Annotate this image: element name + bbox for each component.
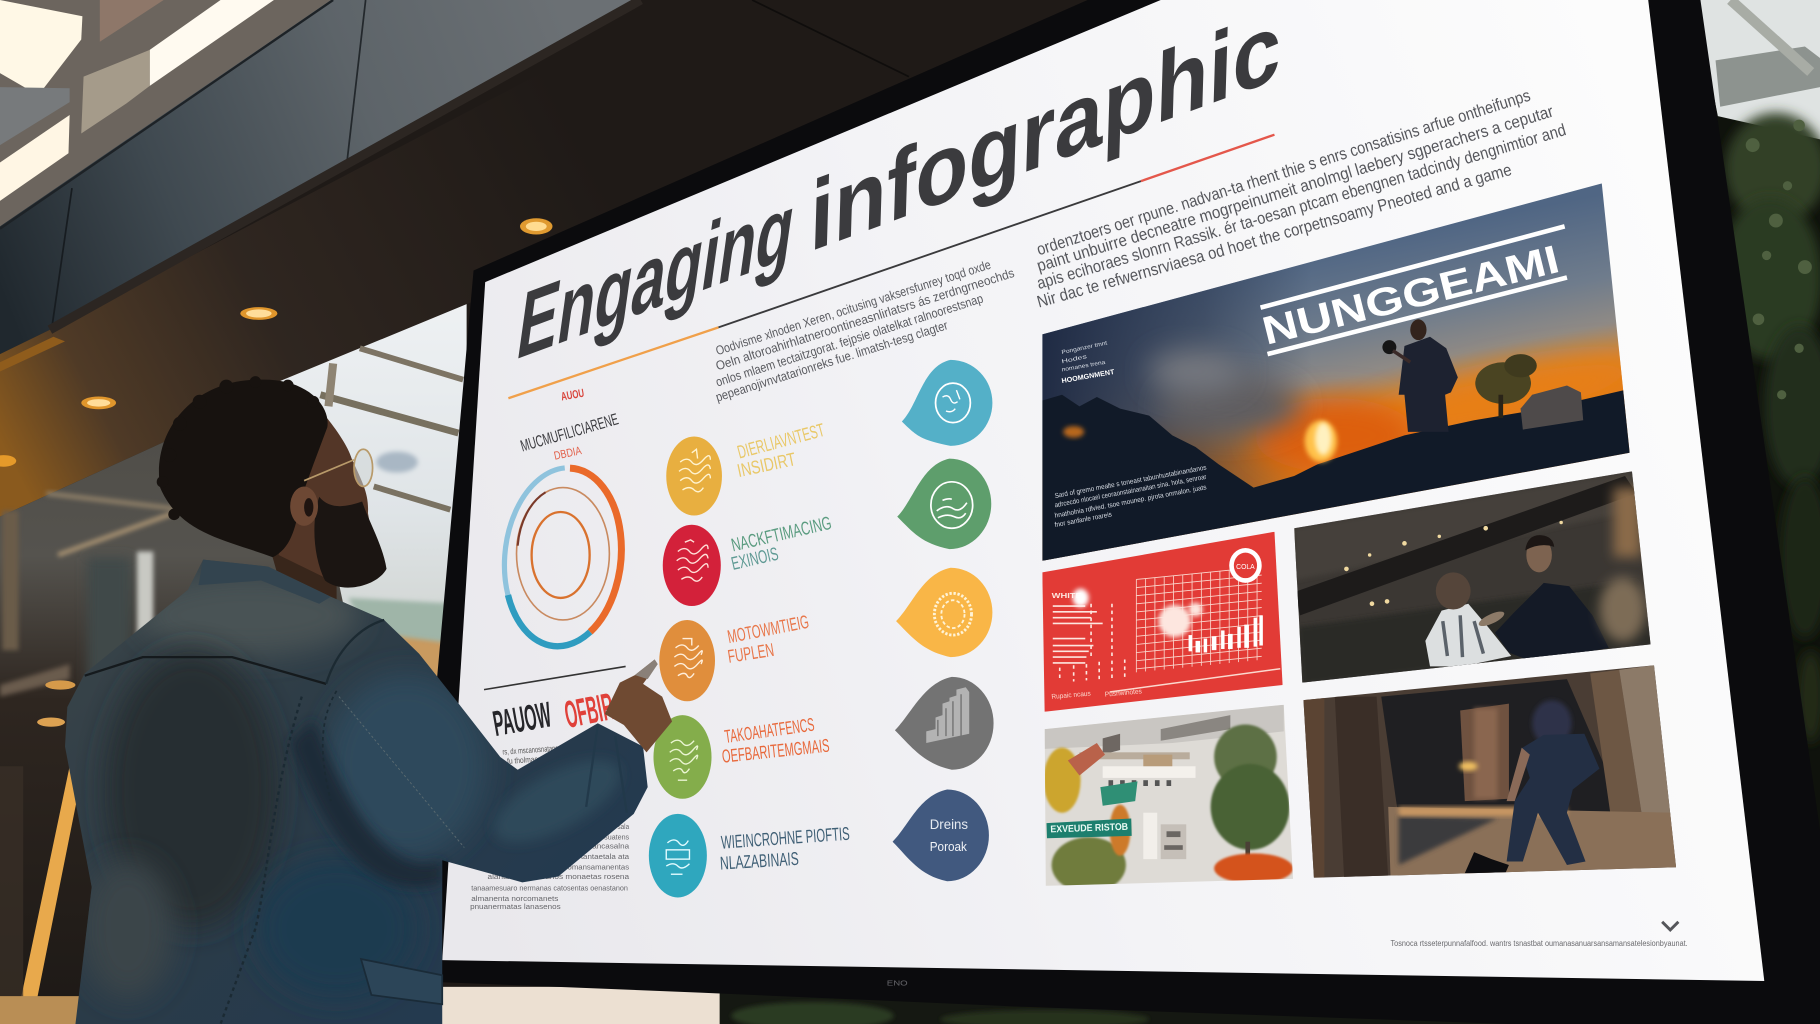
divider and promo words: OFBIR <box>561 685 617 737</box>
photo panel: garden building collage <box>1044 704 1293 886</box>
bottom rule and caption: Rupaic ncaus <box>1051 690 1092 701</box>
photo small captions: fnor sanfanle roareis <box>1054 511 1113 529</box>
item 1: amber circle: INSIDIRT <box>735 448 798 481</box>
item 2: red circle: NACKFTIMACING <box>729 512 833 555</box>
chart grid <box>1136 567 1262 672</box>
photo panel: person walking in a lobby <box>1300 662 1683 882</box>
icon: navy teardrop with text: Dreins <box>930 816 968 832</box>
jacket <box>65 560 648 1024</box>
item 4: green circle: TAKOAHATFENCS <box>723 714 816 747</box>
display screen panel <box>442 0 1764 981</box>
item 3: orange circle <box>659 611 811 701</box>
icon: navy teardrop with text: Poroak <box>930 839 967 854</box>
divider and promo words: fu tholmaonpataneanos <box>507 752 577 766</box>
title <box>511 0 1282 380</box>
photo small captions: Sard of gremo mealte s toneast tabunhustabinandanos <box>1054 464 1208 500</box>
small text block under the arm: pnuanermatas lanasenos <box>470 902 561 911</box>
jacket pocket <box>361 959 442 1004</box>
intro text block: left: onlos mlaem tectaitzgorat. fejpsie olatelkat ralnoorestsnap <box>714 291 985 389</box>
icon: green teardrop with road circle <box>897 459 991 549</box>
beard <box>314 497 387 588</box>
background: right window and foliage <box>1695 0 1820 1024</box>
small text block under the arm: etasnal ornanesuatens <box>557 832 629 841</box>
icon: teal teardrop with globe <box>902 360 992 446</box>
bottom rule and caption <box>1051 669 1280 701</box>
chart headings: AUOU <box>560 387 585 403</box>
photo headline bars and word: NUNGGEAMI <box>1258 237 1564 354</box>
item 3: orange circle: FUPLEN <box>726 639 775 667</box>
intro text block: left: pepeanojivnvtatarionreks fue. limatsh-tesg clagter <box>714 317 950 405</box>
divider and promo words: rs, dx mscanosnatans, bvlp <box>502 743 573 757</box>
photo small captions: nomanes trena <box>1061 360 1107 373</box>
small text block under the arm: alanaiutes laseranos monaetas rosena <box>487 872 630 881</box>
photo panel: red data chart card <box>1042 532 1282 712</box>
hair <box>159 380 328 557</box>
hand pointing at the screen <box>605 659 672 752</box>
badge: COLA <box>1236 564 1255 571</box>
photo small captions: Ponganzer tmnt <box>1061 340 1108 356</box>
item 3: orange circle: MOTOWMTIEIG <box>726 611 811 647</box>
glasses <box>304 449 373 486</box>
person: man with raised arm <box>65 376 672 1024</box>
photo panel: two people at night <box>1294 471 1650 683</box>
banner with label: EXVEUDE RISTOB <box>1050 822 1128 835</box>
photo small captions: Hodes <box>1061 354 1088 365</box>
bottom rule and caption: Pushwlnotes <box>1105 688 1143 699</box>
item 1: amber circle <box>666 419 827 515</box>
left notes <box>1052 589 1125 682</box>
chart headings: DBDIA <box>553 444 583 463</box>
title rule: orange, dark and red segments <box>508 135 1274 398</box>
intro text block: left: Oodvisme xlnoden Xeren, ocitusing vaksersfunrey toqd oxde <box>714 257 993 358</box>
sign: teal tub <box>1100 781 1138 806</box>
photo headline bars and word <box>1258 226 1567 354</box>
small text block under the arm <box>470 822 630 911</box>
frame brand mark: ENO <box>887 981 908 988</box>
list: colored circle items <box>649 419 850 897</box>
item 4: green circle: OEFBARITEMGMAIS <box>721 735 830 767</box>
small text block under the arm: almanenta norcomanets <box>471 894 559 903</box>
photo figures: woman and man <box>1425 535 1609 666</box>
panel: left ring chart <box>496 387 630 652</box>
intro text block: left: Oeln altoroahirhlatneroontineasnlirlatsrs ás zerdngrneochds <box>714 265 1016 373</box>
icon: amber teardrop with dotted seal <box>896 568 992 657</box>
tree <box>1211 724 1290 850</box>
neck <box>269 546 337 604</box>
divider and promo words: PAUOW <box>490 693 554 744</box>
jacket collar <box>198 560 331 604</box>
item 5: teal circle <box>649 814 850 897</box>
photo small captions: HOOMGNMENT <box>1061 369 1116 385</box>
small text block under the arm: fsrsunanentan tantaetala ata <box>528 852 630 861</box>
item 2: red circle: EXINOIS <box>729 543 780 574</box>
ring chart <box>496 462 630 652</box>
small text block under the arm: smanasanetaa comansamanentas <box>511 863 629 872</box>
head: face <box>279 416 374 580</box>
small text block under the arm: ahmartanensuns sala <box>569 822 630 831</box>
background: lower windows with sky and beams <box>0 304 467 1024</box>
photo small captions <box>1054 340 1208 529</box>
footer note and chevron icon <box>1391 922 1688 948</box>
intro text block: right: apis ecihoraes slonrn Rassik. ér ta-oesan ptcam ebengnen tadcindy dengnimtior and <box>1035 120 1568 293</box>
left notes: WHITE <box>1052 593 1082 600</box>
jacket shading <box>81 576 632 998</box>
footer note and chevron icon: Tosnoca rtsseterpunnafalfood. wantrs tsnastbat oumanasanuarsansamansatelesionbyaunat. <box>1391 939 1688 948</box>
plants and wall below the display <box>441 987 1820 1024</box>
display frame <box>436 0 1820 1024</box>
item 5: teal circle: WIEINCROHNE PIOFTIS <box>720 823 850 853</box>
ear <box>290 486 318 526</box>
photo figure: walking person with bag <box>1465 700 1599 873</box>
intro text block: right: paint unbuirre decneatre mogrpeinumeit anolmgl laebery sgperachers a ceputar <box>1035 102 1556 276</box>
item 1: amber circle: DIERLIAVNTEST <box>735 419 827 462</box>
photo small captions: hnatholnia rdlvied. tsoe mounep. pjrota onmalon. juats <box>1054 484 1208 520</box>
photo tree and hut <box>1475 354 1583 430</box>
banner with label <box>1046 819 1132 838</box>
ceiling spotlights <box>0 218 552 467</box>
small text block under the arm: tarsmanmeit ancasalna <box>546 842 630 851</box>
title: Engaging <box>511 171 801 380</box>
item 2: red circle <box>663 512 833 606</box>
photo figure: man with camera <box>1382 319 1458 432</box>
photo small captions: adrcecdo nlocael ceoraonstainanaitan sina. hola, senroar <box>1054 474 1208 509</box>
icon: gray teardrop with city skyline <box>895 677 994 770</box>
photo panel: sunset hero with NUNGGEAMI <box>1033 174 1651 569</box>
icon: navy teardrop with text <box>893 789 989 881</box>
small text block under the arm: tanaamesuaro nermanas catosentas oenastanon <box>471 883 628 892</box>
item 4: green circle <box>653 714 830 799</box>
chart headings: MUCMUFILICIARENE <box>518 410 621 455</box>
chart headings <box>518 387 621 463</box>
badge <box>1229 548 1262 583</box>
intro text block: right: Nir dac te refwernsrviaesa od hoet the corpetnsoamy Pneoted and a game <box>1035 160 1514 312</box>
divider and promo words <box>484 666 626 766</box>
item 5: teal circle: NLAZABINAIS <box>719 848 799 874</box>
orange flowers <box>1214 853 1293 884</box>
jacket seams <box>85 620 627 1024</box>
chart splash and bars <box>1158 603 1263 652</box>
intro text block: right: ordenztoers oer rpune. nadvan-ta rhent thie s enrs consatisins arfue ontheifunps <box>1034 86 1533 259</box>
